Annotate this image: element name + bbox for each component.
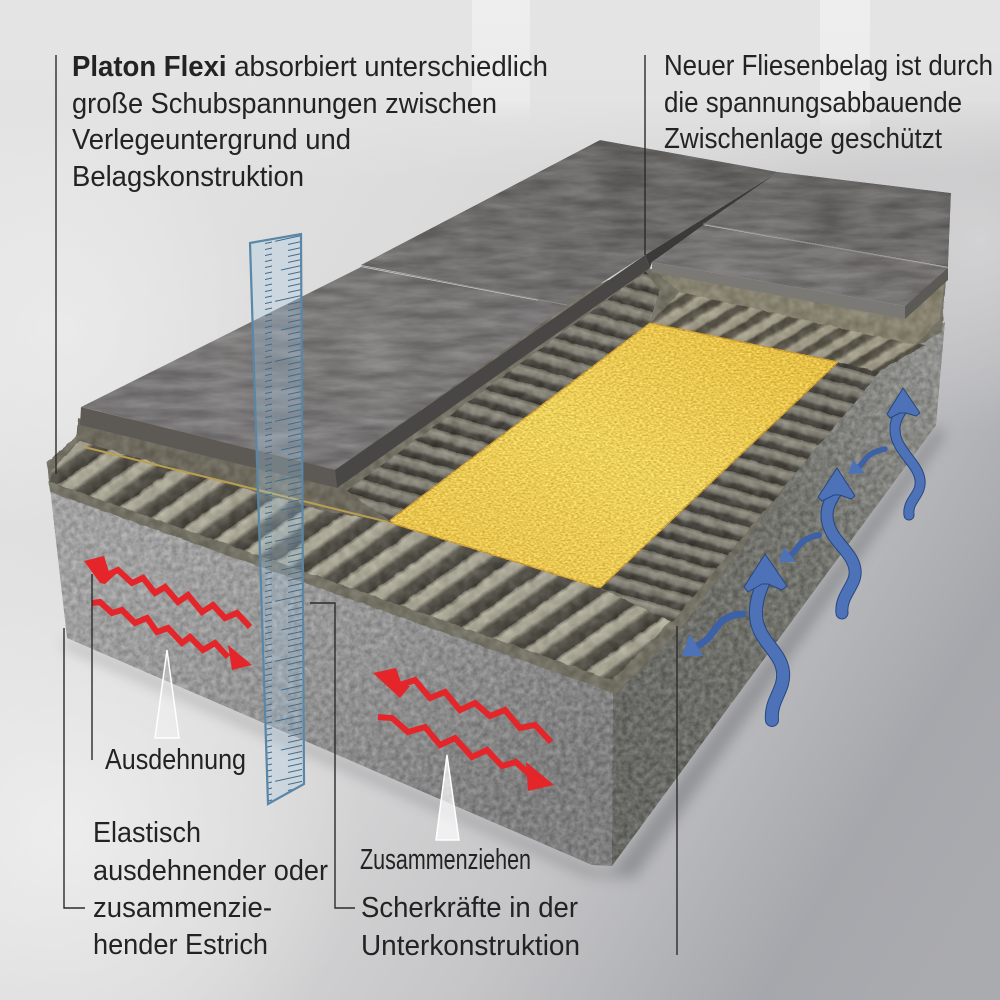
text: new tile covering: die spannungsabbauende <box>664 87 962 119</box>
gap between tile groups <box>645 172 778 268</box>
right front tile <box>652 225 948 306</box>
left tile front side <box>80 407 337 488</box>
tiles <box>76 140 951 522</box>
right comb ridges <box>600 362 880 622</box>
yellow mat edge under left tile <box>84 447 388 522</box>
red arrow: bottom right <box>378 717 554 791</box>
tile seams <box>361 224 948 305</box>
red arrow: top right <box>373 668 551 742</box>
text: elastic screed: hender Estrich <box>93 929 268 961</box>
text: new tile covering: Zwischenlage geschützt <box>664 123 942 155</box>
text: Ausdehnung: Ausdehnung <box>105 744 246 776</box>
concrete front face <box>50 488 618 866</box>
right back tile <box>703 172 951 267</box>
left tile <box>81 267 567 470</box>
blue arrow: moisture 1 <box>744 554 787 720</box>
leader lines <box>56 55 677 955</box>
callout pointer: contraction <box>436 755 459 840</box>
text: Platon Flexi <box>72 51 548 193</box>
text: elastic screed: ausdehnender oder <box>93 855 328 887</box>
yellow Platon Flexi mat <box>388 323 838 588</box>
red arrow: bottom left <box>92 602 252 670</box>
blue arrow: side spread 3 <box>848 449 885 474</box>
back comb ridges <box>650 292 925 372</box>
text: Platon Flexi: Verlegeuntergrund und <box>72 124 351 156</box>
text: shear forces: Unterkonstruktion <box>361 930 580 962</box>
text: Platon Flexi: Platon Flexi absorbiert unterschiedlich <box>72 51 548 83</box>
mortar base <box>47 268 946 694</box>
bedding layers under left tile <box>76 418 392 522</box>
upper tile <box>361 140 778 305</box>
text: new tile covering <box>664 50 993 155</box>
text: Zusammenziehen: Zusammenziehen <box>360 844 531 876</box>
red arrow: top left <box>84 556 250 627</box>
text: elastic screed <box>93 817 328 961</box>
blue arrow: moisture 2 <box>818 468 855 613</box>
left tile right side <box>335 255 650 488</box>
transparent ruler <box>250 230 307 805</box>
front comb ridges <box>50 440 672 680</box>
ruler tick marks <box>265 236 302 802</box>
mortar comb layer <box>47 268 946 694</box>
concrete block <box>50 322 945 866</box>
middle comb ridges <box>345 272 660 522</box>
right tile end side <box>905 267 948 319</box>
text: elastic screed: zusammenzie- <box>93 892 272 924</box>
text: shear forces: Scherkräfte in der <box>361 892 578 924</box>
ruler outline <box>250 234 304 804</box>
text: Platon Flexi: große Schubspannungen zwischen <box>72 88 497 120</box>
text: elastic screed: Elastisch <box>93 817 201 849</box>
text: shear forces <box>361 892 580 962</box>
callout pointer: expansion <box>155 650 179 738</box>
blue arrow: moisture 3 <box>887 388 920 515</box>
text: Platon Flexi: Belagskonstruktion <box>72 161 304 193</box>
blue arrow: side spread 1 <box>682 614 743 656</box>
mortar rim behind right tile <box>655 272 945 345</box>
blue arrow: side spread 2 <box>779 535 819 562</box>
concrete side face <box>612 322 945 866</box>
right tile side <box>652 262 905 319</box>
block shadow <box>62 425 945 878</box>
